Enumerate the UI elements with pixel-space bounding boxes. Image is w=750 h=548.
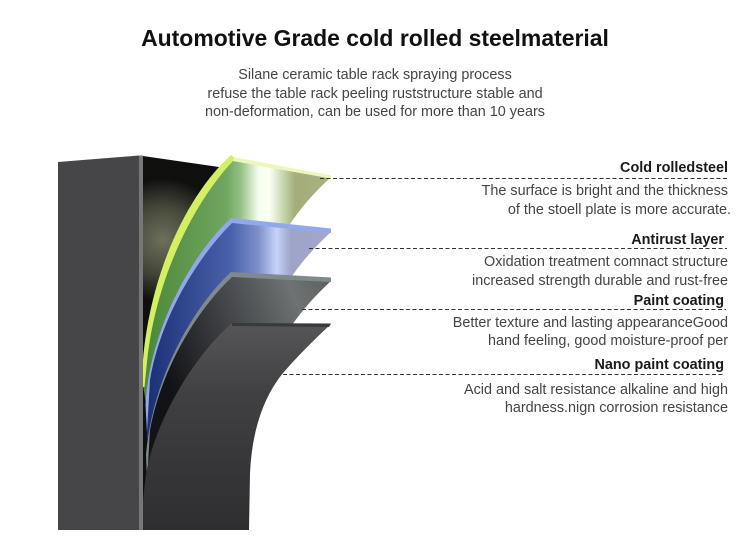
layer: cold rolled steel: [143, 155, 331, 410]
description: nano paint coating: [464, 382, 728, 416]
description: antirust layer: Oxidation treatment comnact structure: [484, 254, 728, 270]
label: antirust layer: Antirust layer: [631, 232, 724, 248]
intro text: non-deformation, can be used for more than 10 years: [205, 104, 545, 120]
description: antirust layer: increased strength durable and rust-free: [472, 273, 728, 289]
label: paint coating: Paint coating: [634, 293, 724, 309]
intro text: Silane ceramic table rack spraying process: [238, 67, 512, 83]
intro text: [205, 67, 545, 120]
description: paint coating: Better texture and lasting appearanceGood: [453, 315, 728, 331]
label: cold rolled steel: Cold rolledsteel: [620, 160, 728, 176]
description: cold rolled steel: of the stoell plate is more accurate.: [508, 202, 731, 218]
description: antirust layer: [472, 254, 728, 289]
description: paint coating: [453, 315, 728, 349]
label: nano paint coating: Nano paint coating: [594, 357, 724, 373]
description: cold rolled steel: [482, 183, 731, 218]
layer: antirust: [146, 218, 331, 440]
description: nano paint coating: Acid and salt resistance alkaline and high: [464, 382, 728, 398]
description: paint coating: hand feeling, good moisture-proof per: [488, 333, 728, 349]
layer: paint coating: [146, 272, 331, 490]
intro text: refuse the table rack peeling ruststructure stable and: [207, 86, 543, 102]
left steel face: [58, 156, 143, 530]
title: Automotive Grade cold rolled steelmaterial: [141, 25, 609, 51]
leader line: cold rolled steel: [320, 178, 728, 180]
description: cold rolled steel: The surface is bright and the thickness: [482, 183, 728, 199]
description: nano paint coating: hardness.nign corrosion resistance: [505, 400, 728, 416]
layer: nano paint coating: [143, 323, 331, 530]
inner dark back panel: [143, 156, 219, 530]
leader line: nano paint coating: [283, 374, 725, 376]
leader line: paint coating: [302, 308, 726, 310]
leader line: antirust layer: [309, 248, 727, 250]
